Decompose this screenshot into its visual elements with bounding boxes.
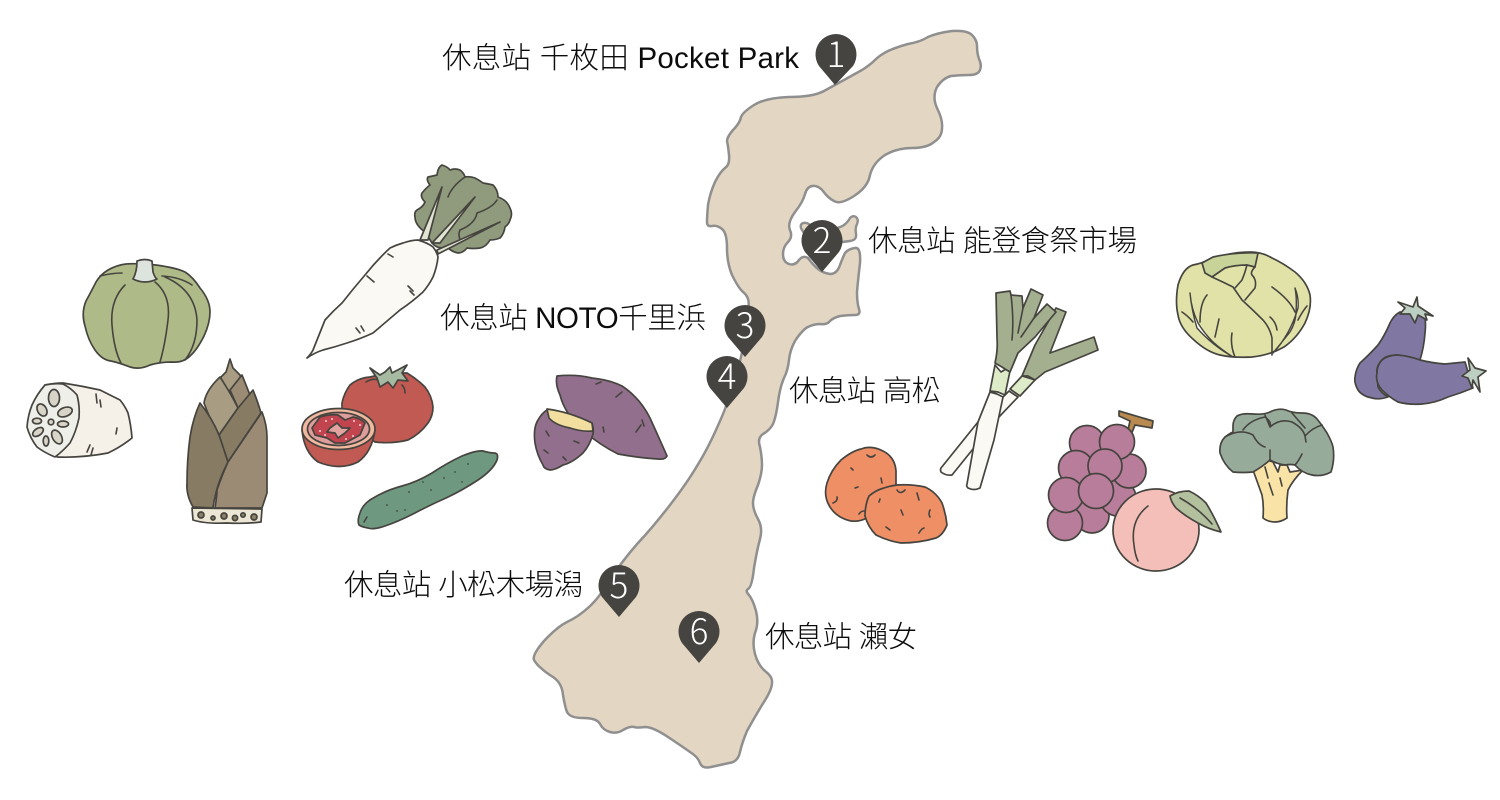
pin 3: 3 [736, 298, 754, 349]
pin 6 [678, 604, 720, 663]
icon: bamboo shoot [187, 359, 267, 523]
icon: cabbage [1176, 252, 1310, 357]
icon: sweet potato [534, 375, 667, 470]
pin 5 [598, 558, 640, 617]
panel: map of the peninsula [534, 31, 981, 768]
icon: potatoes [826, 447, 947, 543]
icon: pumpkin [83, 260, 210, 368]
icon: grapes [1048, 411, 1153, 540]
pin 6: 6 [690, 604, 708, 655]
label: Chimaida Pocket Park: 休息站 千枚田 Pocket Park [442, 42, 799, 75]
icon: broccoli [1220, 409, 1334, 522]
icon: daikon radish [307, 165, 512, 358]
pin 1: 1 [827, 27, 845, 78]
pin 3 [724, 298, 766, 357]
pin 4 [706, 349, 748, 408]
icon: leeks [940, 289, 1098, 490]
label: Komatsu Kibagata: 休息站 小松木場潟 [344, 569, 583, 602]
icon: eggplants [1355, 297, 1486, 404]
pin 2 [802, 213, 842, 272]
pin 1 [816, 27, 856, 85]
label: Senami: 休息站 瀨女 [765, 621, 917, 654]
label: Noto Shokusai Market: 休息站 能登食祭市場 [868, 225, 1137, 258]
icon: peach [1113, 489, 1221, 571]
pin 2: 2 [813, 213, 831, 264]
icon: lotus root [27, 383, 132, 457]
label: Takamatsu: 休息站 高松 [789, 375, 941, 408]
pin 5: 5 [610, 558, 628, 609]
icon: cucumber [358, 451, 498, 529]
map: Notojima island [801, 216, 858, 244]
map: peninsula outline [534, 31, 981, 768]
icon: tomatoes [302, 365, 433, 466]
label: NOTO Chirihama: 休息站 NOTO千里浜 [440, 302, 706, 335]
pin 4: 4 [718, 349, 736, 400]
